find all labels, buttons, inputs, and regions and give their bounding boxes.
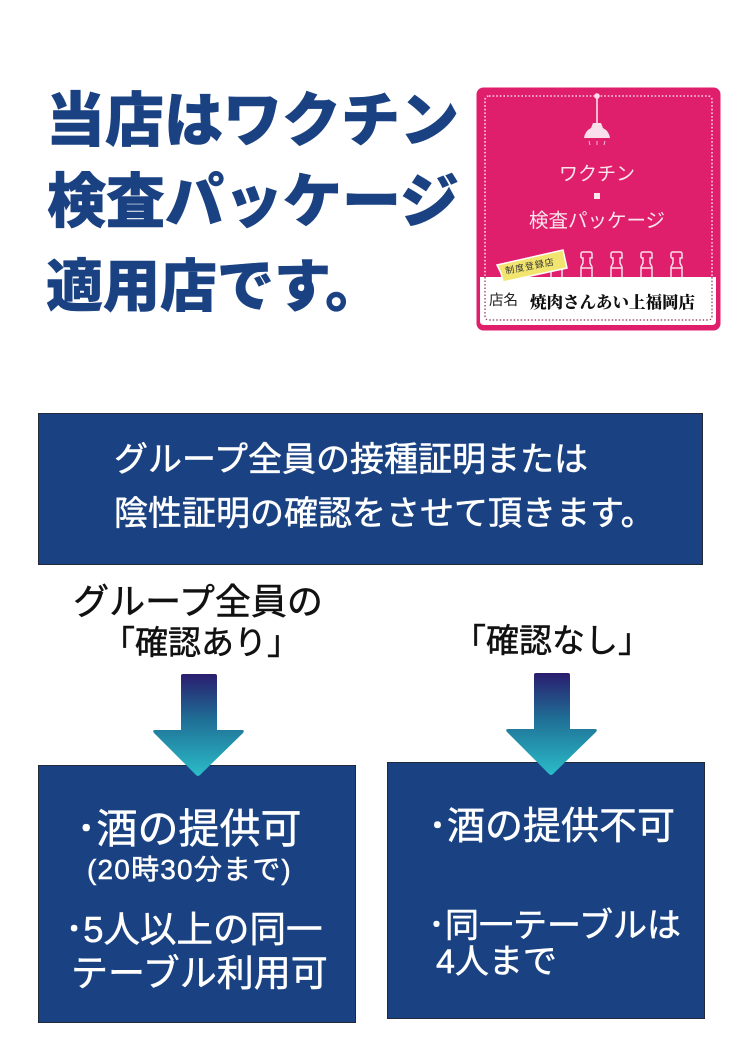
icon: pendant lamp — [584, 93, 610, 145]
shop name strip: 店名 — [489, 292, 518, 309]
heading: not confirmed: 「確認なし」 — [453, 622, 651, 659]
heading: confirmed — [73, 581, 323, 661]
arrow: right down — [506, 673, 597, 775]
panel: confirmation notice: グループ全員の接種証明または — [114, 441, 588, 479]
panel: with confirmation: (20時30分まで) — [87, 854, 292, 885]
title: 検査パッケージ — [47, 169, 459, 235]
icon: bottles — [551, 252, 682, 277]
heading: confirmed: 「確認あり」 — [102, 624, 300, 661]
ribbon: registered shop — [497, 250, 567, 282]
panel: confirmation notice: 陰性証明の確認をさせて頂きます。 — [114, 495, 655, 533]
badge heading: ワクチン — [559, 163, 635, 185]
shop name strip — [480, 277, 716, 325]
panel: without confirmation: ･酒の提供不可 — [428, 806, 675, 848]
panel: without confirmation: 4人まで — [436, 943, 557, 981]
panel: with confirmation: ･酒の提供可 — [76, 806, 302, 852]
badge: vaccine and test package sticker — [476, 88, 720, 330]
panel: with confirmation: テーブル利用可 — [71, 953, 328, 994]
title — [46, 88, 459, 319]
panel: confirmation notice — [38, 413, 703, 565]
shop name strip: 焼肉さんあい上福岡店 — [529, 292, 696, 312]
ribbon: registered shop: 制度登録店 — [504, 256, 555, 276]
arrow: left down — [153, 674, 244, 776]
panel: with confirmation — [38, 765, 356, 1023]
panel: without confirmation — [387, 762, 705, 1019]
panel: with confirmation: ･5人以上の同一 — [65, 909, 323, 950]
title: 当店はワクチン — [46, 88, 459, 154]
badge heading: 検査パッケージ — [529, 210, 665, 232]
badge heading — [529, 163, 665, 232]
title: 適用店です。 — [46, 255, 382, 319]
heading: confirmed: グループ全員の — [73, 581, 323, 622]
panel: without confirmation: ･同一テーブルは — [428, 907, 681, 945]
